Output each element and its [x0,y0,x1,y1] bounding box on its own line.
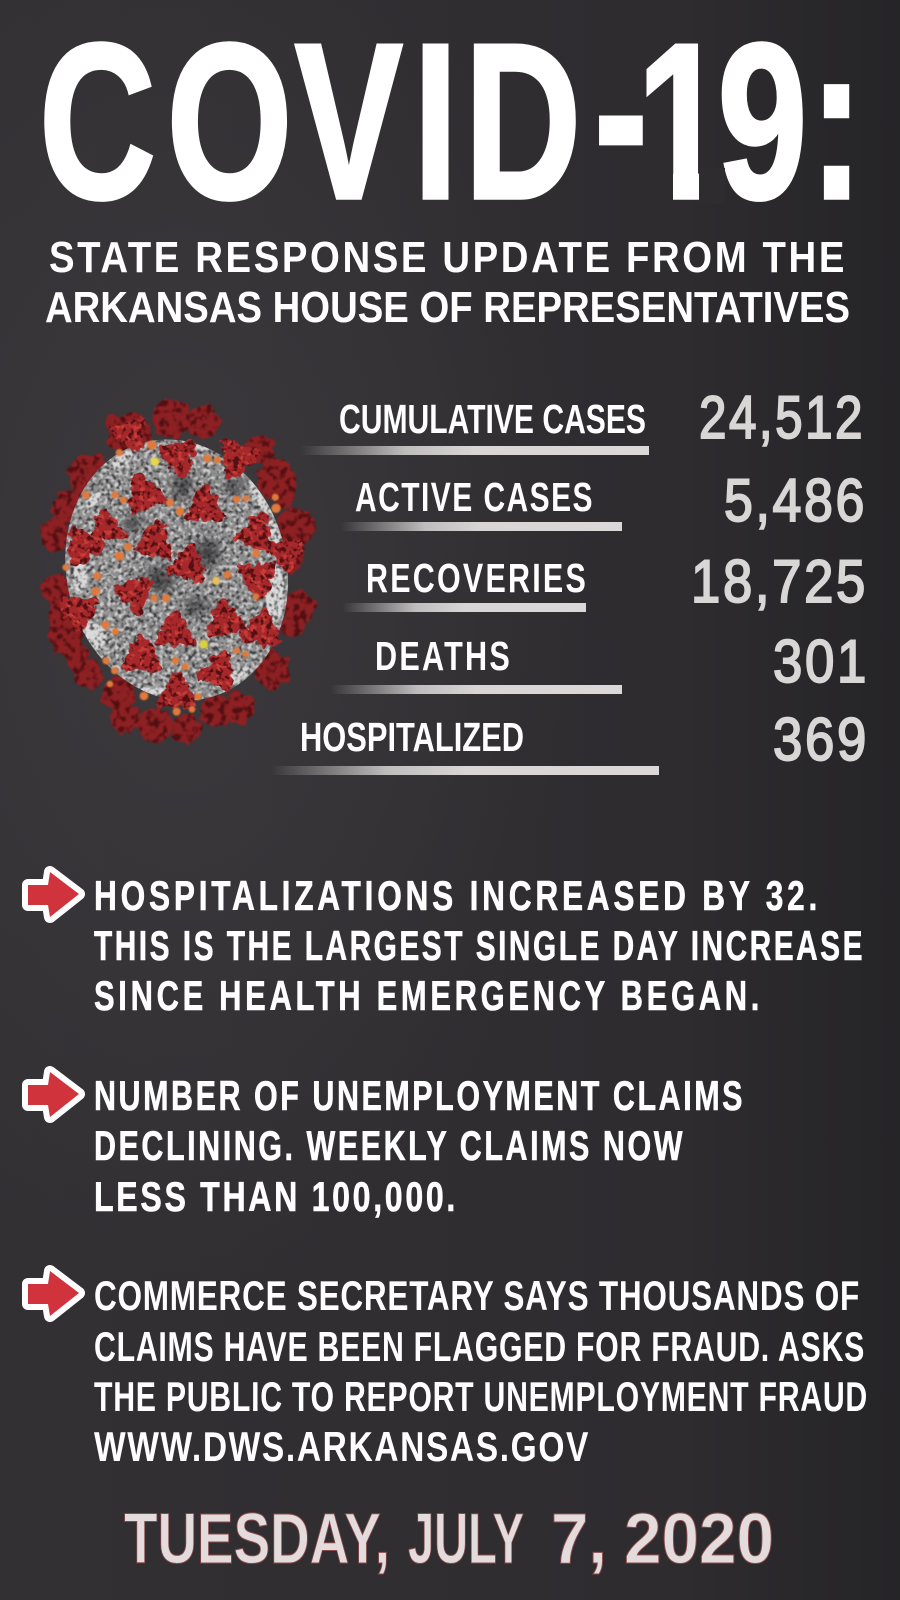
icon: coronavirus [38,399,315,743]
text: hospitalizations [94,872,865,1019]
row: active cases: 5,486 [724,467,867,534]
date: JULY [408,1500,524,1579]
row: active cases: ACTIVE CASES [355,474,594,520]
row: cumulative cases: CUMULATIVE CASES [339,396,646,442]
text: commerce secretary: WWW.DWS.ARKANSAS.GOV [94,1423,590,1470]
row: hospitalized: 369 [773,706,869,773]
row: deaths: DEATHS [375,633,512,679]
icon: arrow 1 [28,872,79,917]
row: hospitalized [270,706,869,775]
subtitle [45,233,850,332]
inner spikes [51,415,304,708]
text: unemployment: LESS THAN 100,000. [94,1173,458,1220]
text: commerce secretary [94,1272,868,1470]
row: recoveries: RECOVERIES [366,555,588,601]
outer spikes [39,399,315,743]
row: hospitalized: HOSPITALIZED [300,714,524,760]
row: deaths: 301 [773,628,869,695]
icon: arrow 2 [28,1072,79,1117]
date: 7, [551,1500,607,1579]
date: TUESDAY, [124,1500,390,1579]
icon: arrow 3 [28,1271,79,1316]
date: 2020 [624,1500,774,1579]
row: recoveries [342,548,868,615]
row: cumulative cases [300,384,865,455]
orange dots [62,440,281,716]
date [124,1500,774,1579]
text: unemployment [94,1072,745,1220]
text: unemployment: DECLINING. WEEKLY CLAIMS NOW [94,1122,685,1169]
row: deaths [330,628,869,695]
row: recoveries: 18,725 [691,548,868,615]
row: cumulative cases: 24,512 [699,384,865,451]
yellow dots [151,457,220,649]
sphere [38,416,315,724]
row: active cases [340,467,867,534]
